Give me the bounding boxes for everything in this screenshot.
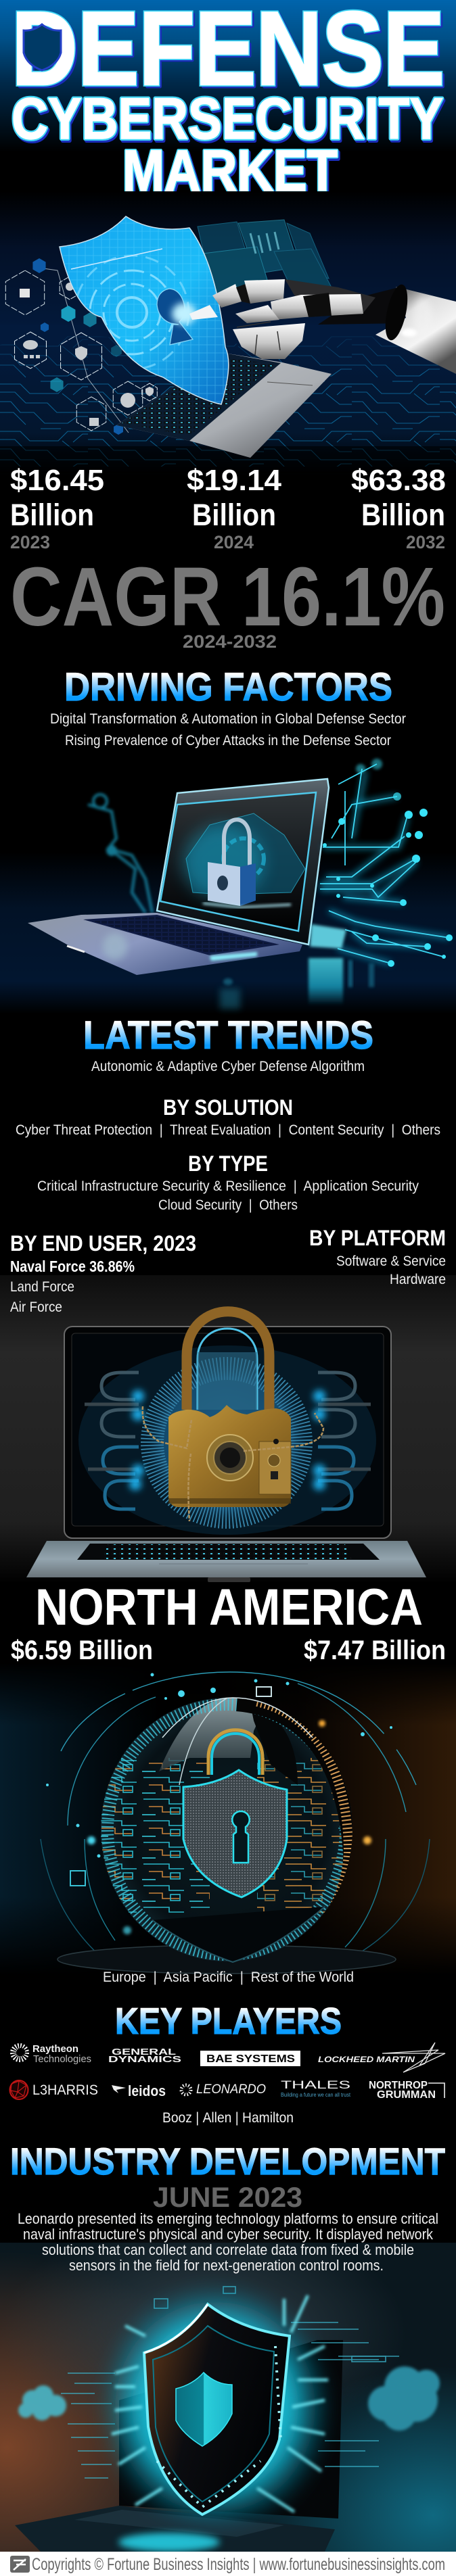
keyhole bbox=[232, 1811, 250, 1863]
shield bbox=[144, 2304, 290, 2514]
logo: Thales bbox=[281, 2078, 351, 2098]
shield bbox=[54, 210, 237, 406]
logo: Booz Allen Hamilton: Booz | Allen | Hamilton bbox=[162, 2110, 294, 2126]
logo: Leidos bbox=[112, 2082, 166, 2099]
segment: by end user: BY END USER, 2023 bbox=[10, 1231, 196, 1256]
logo: General Dynamics: GENERAL bbox=[112, 2047, 176, 2057]
stat 2024: 2024 bbox=[214, 532, 254, 552]
segment: by solution bbox=[16, 1095, 440, 1138]
logo: Raytheon Technologies bbox=[14, 2043, 91, 2065]
glowing chip and reflection bbox=[220, 924, 374, 1009]
icon hexagons bbox=[5, 267, 157, 433]
data fragments bbox=[61, 2287, 399, 2478]
logo: Leidos: leidos bbox=[128, 2082, 166, 2099]
laptop screen bbox=[157, 779, 329, 945]
padlock shackle bbox=[187, 1312, 269, 1410]
segment: by type bbox=[37, 1151, 419, 1213]
dashboard panels bbox=[198, 220, 332, 301]
latest trends text: Autonomic & Adaptive Cyber Defense Algorithm bbox=[91, 1059, 365, 1074]
segment: by end user: Air Force bbox=[10, 1299, 62, 1315]
CAGR period: 2024-2032 bbox=[183, 631, 277, 652]
shield padlock bbox=[183, 1730, 287, 1897]
market value stats bbox=[10, 464, 446, 552]
lower shield outline bbox=[152, 1907, 325, 1962]
logo: General Dynamics bbox=[108, 2047, 181, 2064]
stat 2024: $19.14 bbox=[187, 464, 282, 497]
development text: sensors in the field for next-generation control rooms. bbox=[69, 2257, 384, 2274]
orbit arcs bbox=[41, 1672, 430, 1957]
circuit board bbox=[0, 325, 456, 473]
title line: MARKET: MARKET bbox=[122, 139, 338, 204]
logo: BAE Systems: BAE SYSTEMS bbox=[206, 2053, 295, 2065]
illustration: laptop with padlock bbox=[0, 759, 456, 1014]
illustration: glowing shield bbox=[0, 2218, 456, 2576]
segment: by platform: Software & Service bbox=[336, 1254, 446, 1269]
segment: by solution: BY SOLUTION bbox=[163, 1095, 293, 1120]
company logos bbox=[9, 2043, 445, 2126]
logo: L3Harris bbox=[9, 2080, 98, 2099]
laptop screen bbox=[64, 1327, 391, 1538]
stat 2032: $63.38 bbox=[351, 464, 446, 497]
logo: Lockheed Martin bbox=[318, 2043, 445, 2072]
stat 2023: $16.45 bbox=[10, 464, 104, 497]
segment: by type: Critical Infrastructure Security & Resilience | Application Security bbox=[37, 1178, 419, 1194]
stat 2032: 2032 bbox=[406, 532, 445, 552]
illustration: laptop with golden padlock bbox=[0, 1275, 456, 1583]
laptop base bbox=[28, 913, 302, 975]
stat 2023: Billion bbox=[10, 498, 94, 532]
date: JUNE 2023 bbox=[153, 2181, 302, 2213]
circuit traces left bbox=[88, 794, 152, 913]
footer bbox=[0, 2552, 456, 2576]
right circuit loops bbox=[318, 1373, 371, 1509]
title bbox=[12, 0, 447, 206]
driving factors text: Digital Transformation & Automation in Global Defense Sector bbox=[50, 711, 406, 727]
other regions: Europe | Asia Pacific | Rest of the World bbox=[103, 1970, 354, 1985]
development text bbox=[18, 2210, 438, 2274]
segment: by type: BY TYPE bbox=[188, 1151, 268, 1176]
energy glow bbox=[97, 2282, 334, 2532]
logo: Thales: Building a future we can all trust bbox=[281, 2092, 351, 2098]
platform bbox=[58, 1945, 396, 1974]
circuit nodes bbox=[323, 759, 453, 967]
stat 2032: Billion bbox=[361, 498, 445, 532]
title line: MARKET: MARKET bbox=[122, 139, 338, 204]
logo: Raytheon Technologies: Technologies bbox=[33, 2053, 91, 2065]
logo: Leonardo: LEONARDO bbox=[196, 2082, 266, 2097]
segment: by end user bbox=[10, 1231, 196, 1315]
regional value left: $6.59 Billion bbox=[11, 1636, 153, 1665]
stat 2024: Billion bbox=[192, 498, 276, 532]
logo: L3Harris: L3HARRIS bbox=[32, 2082, 98, 2098]
logo: Northrop Grumman: GRUMMAN bbox=[377, 2089, 436, 2101]
header band bbox=[0, 0, 456, 152]
floating nodes bbox=[46, 1673, 392, 1934]
segment: by end user: Land Force bbox=[10, 1279, 74, 1295]
logo: Northrop Grumman: NORTHROP bbox=[369, 2080, 428, 2091]
circuit glow bbox=[320, 771, 449, 963]
segment: by platform: Hardware bbox=[390, 1272, 446, 1287]
logo: BAE Systems bbox=[200, 2051, 300, 2066]
padlock bbox=[203, 819, 291, 907]
logo: Northrop Grumman bbox=[369, 2080, 444, 2101]
laptop base bbox=[26, 1541, 426, 1582]
cloud right bbox=[368, 2366, 440, 2431]
title line: MARKET: MARKET bbox=[124, 141, 339, 206]
chains bbox=[143, 1406, 323, 1521]
heading: latest trends: LATEST TRENDS bbox=[83, 1013, 373, 1057]
regional value left: 2022 bbox=[11, 1666, 47, 1685]
robot hand bbox=[189, 279, 456, 374]
padlock body bbox=[168, 1405, 291, 1507]
keyhole bbox=[157, 289, 193, 345]
regional value right: 2023 bbox=[409, 1666, 446, 1685]
stat 2023: 2023 bbox=[10, 532, 50, 552]
driving factors text: Rising Prevalence of Cyber Attacks in the Defense Sector bbox=[65, 733, 391, 748]
footer logo bbox=[10, 2556, 30, 2573]
cloud left bbox=[18, 2385, 66, 2420]
logo: Thales: THALES bbox=[281, 2078, 350, 2091]
stat 2023 bbox=[10, 464, 104, 552]
icon glyphs bbox=[20, 283, 154, 426]
logo: General Dynamics: DYNAMICS bbox=[108, 2054, 181, 2064]
blue glows bbox=[129, 1390, 325, 1490]
segment: by platform bbox=[309, 1226, 446, 1287]
illustration: globe with shield lock bbox=[0, 1663, 456, 1974]
regional value left bbox=[11, 1636, 153, 1685]
development text: solutions that can collect and correlate data from fixed & mobile bbox=[42, 2241, 414, 2258]
hero illustration: robot hand and shield bbox=[0, 191, 456, 475]
stat 2032 bbox=[351, 464, 446, 552]
heading: key players: KEY PLAYERS bbox=[115, 2000, 342, 2042]
laptop bbox=[15, 2340, 343, 2552]
segment: by type: Cloud Security | Others bbox=[158, 1197, 298, 1213]
sphere bbox=[98, 1698, 355, 1961]
heading: driving factors: DRIVING FACTORS bbox=[64, 665, 392, 709]
inner shield bbox=[176, 2372, 232, 2446]
regional value right bbox=[304, 1636, 446, 1685]
radial fan bbox=[140, 1356, 313, 1529]
laptop bbox=[116, 353, 332, 458]
stat 2024 bbox=[187, 464, 282, 552]
segment: by end user: Naval Force 36.86% bbox=[10, 1258, 135, 1275]
teal hex accents bbox=[32, 258, 145, 435]
left circuit loops bbox=[85, 1373, 139, 1509]
logo: Lockheed Martin: LOCKHEED MARTIN bbox=[318, 2055, 415, 2064]
circuit traces right bbox=[320, 764, 449, 963]
logo: Raytheon Technologies: Raytheon bbox=[32, 2043, 78, 2055]
driving factors text bbox=[50, 711, 406, 748]
